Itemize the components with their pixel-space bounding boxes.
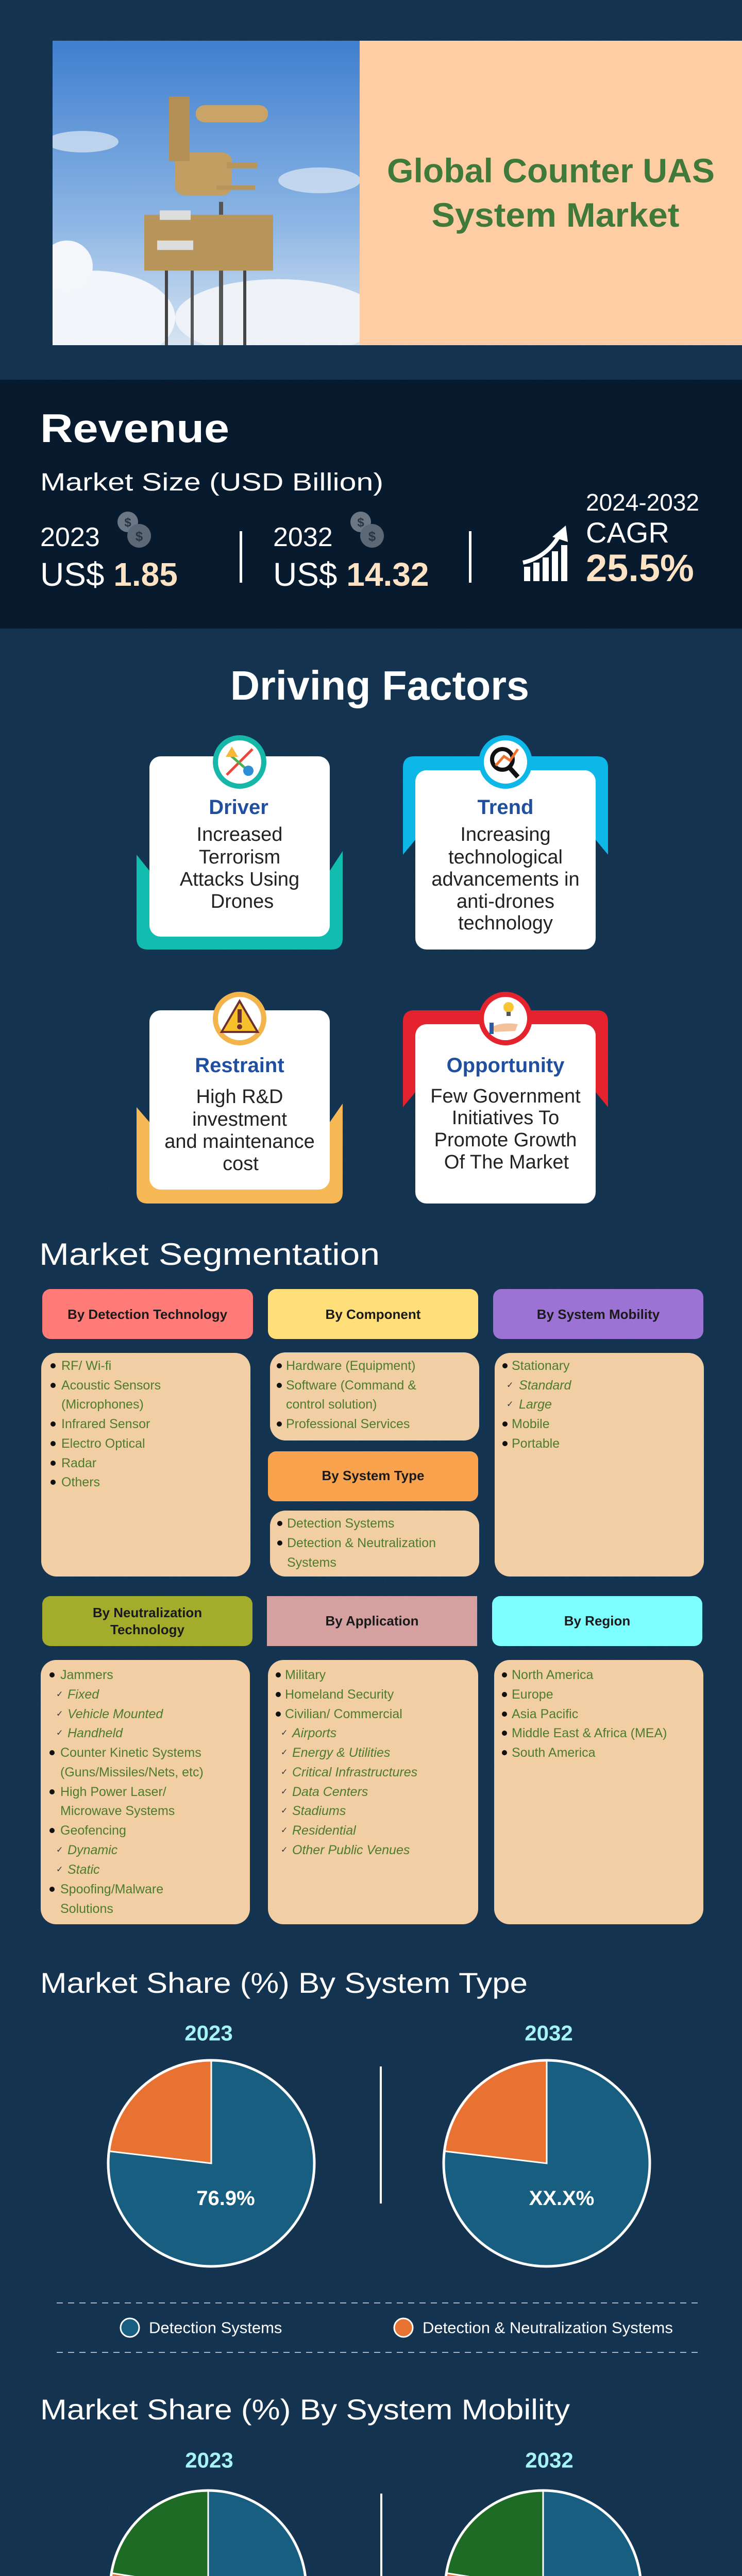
segment: neutralization technology: Handheld — [68, 1726, 123, 1740]
segment: component: control solution) — [286, 1397, 377, 1412]
panel: segmentation — [41, 1289, 704, 1924]
stat: CAGR: 25.5% — [586, 547, 694, 589]
segment: system type: Detection Systems — [287, 1516, 394, 1531]
card: trend — [403, 735, 608, 950]
segment: system mobility: Stationary — [512, 1359, 570, 1373]
stat: 2032 — [273, 512, 429, 593]
card: trend: anti-drones — [457, 891, 554, 912]
segment: component: Hardware (Equipment) — [286, 1359, 415, 1373]
segment: neutralization technology: Microwave Systems — [60, 1804, 175, 1818]
heading: driving factors: Driving Factors — [230, 663, 529, 708]
card: restraint: High R&D — [196, 1086, 283, 1108]
title panel — [360, 41, 742, 345]
segment: detection technology: (Microphones) — [61, 1397, 144, 1412]
card: restraint: investment — [192, 1109, 287, 1130]
segment: neutralization technology: (Guns/Missiles/Nets, etc) — [60, 1765, 204, 1780]
segment: component: Software (Command & — [286, 1378, 416, 1393]
segment: neutralization technology: ✓ — [56, 1845, 63, 1855]
segment: system mobility: Mobile — [512, 1417, 550, 1431]
segment: neutralization technology: Fixed — [68, 1687, 99, 1702]
card: driver: Driver — [209, 796, 268, 819]
card: driver: Attacks Using — [180, 869, 299, 890]
segment: region: North America — [512, 1668, 593, 1682]
segment: system type — [268, 1451, 479, 1577]
heading: market share by system type: Market Share (%) By System Type — [40, 1967, 528, 1999]
segment: detection technology: By Detection Technology — [68, 1307, 228, 1322]
segment: system type: Detection & Neutralization — [287, 1536, 436, 1550]
card: opportunity: Initiatives To — [452, 1107, 559, 1129]
pie chart: system type 2023 — [108, 2021, 314, 2266]
stat: 2032: $ — [368, 529, 376, 544]
segment: system mobility — [493, 1289, 704, 1577]
segment: region: By Region — [564, 1613, 630, 1629]
card: driver: Drones — [211, 891, 274, 912]
icon: driver — [213, 735, 266, 789]
segment: application: ✓ — [281, 1788, 288, 1796]
pie chart: mobility 2023: 2023 — [185, 2448, 233, 2472]
icon: growth chart — [523, 526, 568, 581]
segment: neutralization technology: ✓ — [56, 1690, 63, 1699]
segment: neutralization technology: Geofencing — [60, 1823, 126, 1838]
segment: detection technology: RF/ Wi-fi — [61, 1359, 111, 1373]
pie chart: system type 2032: 2032 — [525, 2021, 573, 2045]
card: restraint: and maintenance — [164, 1131, 315, 1153]
segment: system mobility: Standard — [519, 1378, 572, 1393]
title panel: System Market — [432, 196, 680, 234]
card: trend: technological — [448, 846, 563, 868]
divider — [240, 531, 242, 583]
card: restraint: Restraint — [195, 1054, 284, 1077]
stat: CAGR: 2024-2032 — [586, 489, 699, 516]
legend: system type — [57, 2303, 701, 2352]
card: trend: technology — [458, 912, 553, 934]
segment: application: Other Public Venues — [292, 1843, 410, 1857]
segment: component — [268, 1289, 479, 1440]
card: driver — [137, 735, 343, 950]
card: opportunity: Promote Growth — [434, 1129, 577, 1151]
icon: warning — [213, 992, 266, 1045]
legend: system type: Detection Systems — [149, 2318, 282, 2337]
card: opportunity: Opportunity — [447, 1054, 565, 1077]
segment: system type: Systems — [287, 1555, 336, 1570]
segment: region: Asia Pacific — [512, 1707, 578, 1721]
card: restraint: cost — [223, 1153, 259, 1175]
segment: detection technology: Infrared Sensor — [61, 1417, 150, 1431]
segment: application: ✓ — [281, 1749, 288, 1757]
segment: neutralization technology: ✓ — [56, 1729, 63, 1737]
segment: component: Professional Services — [286, 1417, 410, 1431]
stat: 2032: $ — [357, 516, 364, 530]
segment: region — [492, 1596, 703, 1924]
segment: neutralization technology: Solutions — [60, 1902, 113, 1916]
card: trend: Trend — [478, 796, 533, 819]
stat: 2023: $ — [124, 516, 131, 530]
pie chart: system type 2032: XX.X% — [529, 2187, 594, 2210]
card: driver: Increased — [197, 824, 282, 845]
segment: neutralization technology: High Power Laser/ — [60, 1785, 166, 1799]
segment: neutralization technology: Dynamic — [68, 1843, 118, 1857]
segment: application: Stadiums — [292, 1804, 346, 1818]
card: trend: advancements in — [431, 869, 580, 890]
card: trend: Increasing — [460, 824, 551, 845]
revenue band — [0, 380, 742, 629]
segment: neutralization technology: Static — [68, 1862, 100, 1877]
segment: application: Military — [285, 1668, 326, 1682]
segment: system mobility: By System Mobility — [537, 1307, 660, 1322]
pie chart: mobility 2023 — [110, 2448, 306, 2576]
segment: region: Middle East & Africa (MEA) — [512, 1726, 667, 1740]
segment: application: ✓ — [281, 1806, 288, 1816]
segment: detection technology: Others — [61, 1475, 100, 1489]
pie chart: system type 2032 — [444, 2021, 650, 2266]
segment: application: ✓ — [281, 1845, 288, 1855]
segment: system mobility: Large — [519, 1397, 552, 1412]
stat: CAGR — [586, 489, 699, 589]
segment: region: South America — [512, 1745, 596, 1760]
stat: 2032: 2032 — [273, 522, 333, 552]
card: opportunity: Of The Market — [444, 1151, 569, 1173]
segment: neutralization technology — [41, 1596, 252, 1924]
pie chart: system type 2023: 76.9% — [196, 2187, 255, 2210]
heading: revenue: Revenue — [40, 405, 229, 451]
segment: system mobility: ✓ — [507, 1400, 513, 1409]
stat: CAGR: CAGR — [586, 516, 669, 549]
segment: neutralization technology: Spoofing/Malware — [60, 1882, 163, 1896]
subtitle: market size: Market Size (USD Billion) — [40, 469, 383, 496]
segment: neutralization technology: Technology — [110, 1622, 185, 1637]
segment: neutralization technology: ✓ — [56, 1709, 63, 1719]
segment: neutralization technology: Vehicle Mounted — [68, 1707, 163, 1721]
segment: neutralization technology: ✓ — [56, 1865, 63, 1874]
pie chart: mobility 2032: 2032 — [525, 2448, 574, 2472]
segment: application: Civilian/ Commercial — [285, 1707, 402, 1721]
stat: 2023: 2023 — [40, 522, 100, 552]
stat: 2023: $ — [136, 529, 143, 544]
stat: 2023: US$ 1.85 — [40, 556, 178, 593]
segment: application: Data Centers — [292, 1785, 368, 1799]
heading: market share by system mobility: Market Share (%) By System Mobility — [40, 2393, 570, 2426]
segment: neutralization technology: By Neutralization — [93, 1605, 202, 1620]
segment: detection technology: Acoustic Sensors — [61, 1378, 161, 1393]
segment: application: Airports — [291, 1726, 336, 1740]
heading: market segmentation: Market Segmentation — [39, 1237, 380, 1272]
segment: system mobility: Portable — [512, 1436, 560, 1451]
segment: component: By Component — [326, 1307, 421, 1322]
card: restraint — [137, 992, 343, 1204]
segment: system mobility: ✓ — [507, 1381, 513, 1390]
stat: 2032: US$ 14.32 — [273, 556, 429, 593]
segment: neutralization technology: Counter Kinetic Systems — [60, 1745, 201, 1760]
title panel: Global Counter UAS — [387, 151, 715, 190]
segment: application: By Application — [325, 1613, 419, 1629]
card: opportunity: Few Government — [430, 1086, 581, 1107]
segment: application: ✓ — [281, 1768, 288, 1776]
segment: application — [267, 1596, 478, 1924]
segment: application: Residential — [292, 1823, 357, 1838]
stat: 2023 — [40, 512, 178, 593]
icon: opportunity — [479, 992, 532, 1045]
segment: application: Homeland Security — [285, 1687, 394, 1702]
card: driver: Terrorism — [199, 846, 280, 868]
segment: region: Europe — [512, 1687, 553, 1702]
segment: detection technology: Electro Optical — [61, 1436, 145, 1451]
segment: detection technology — [41, 1289, 253, 1577]
segment: system type: By System Type — [322, 1468, 424, 1483]
icon: trend — [479, 735, 532, 789]
segment: application: Energy & Utilities — [292, 1745, 390, 1760]
header photo: counter UAS tower — [53, 41, 360, 345]
pie chart: system type 2023: 2023 — [184, 2021, 233, 2045]
segment: application: ✓ — [281, 1826, 288, 1835]
segment: application: Critical Infrastructures — [292, 1765, 417, 1780]
segment: detection technology: Radar — [61, 1456, 96, 1470]
segment: neutralization technology: Jammers — [60, 1668, 113, 1682]
segment: application: ✓ — [281, 1729, 288, 1737]
pie chart: mobility 2032 — [445, 2448, 641, 2576]
legend: system type: Detection & Neutralization Systems — [423, 2318, 673, 2337]
card: opportunity — [403, 992, 608, 1204]
